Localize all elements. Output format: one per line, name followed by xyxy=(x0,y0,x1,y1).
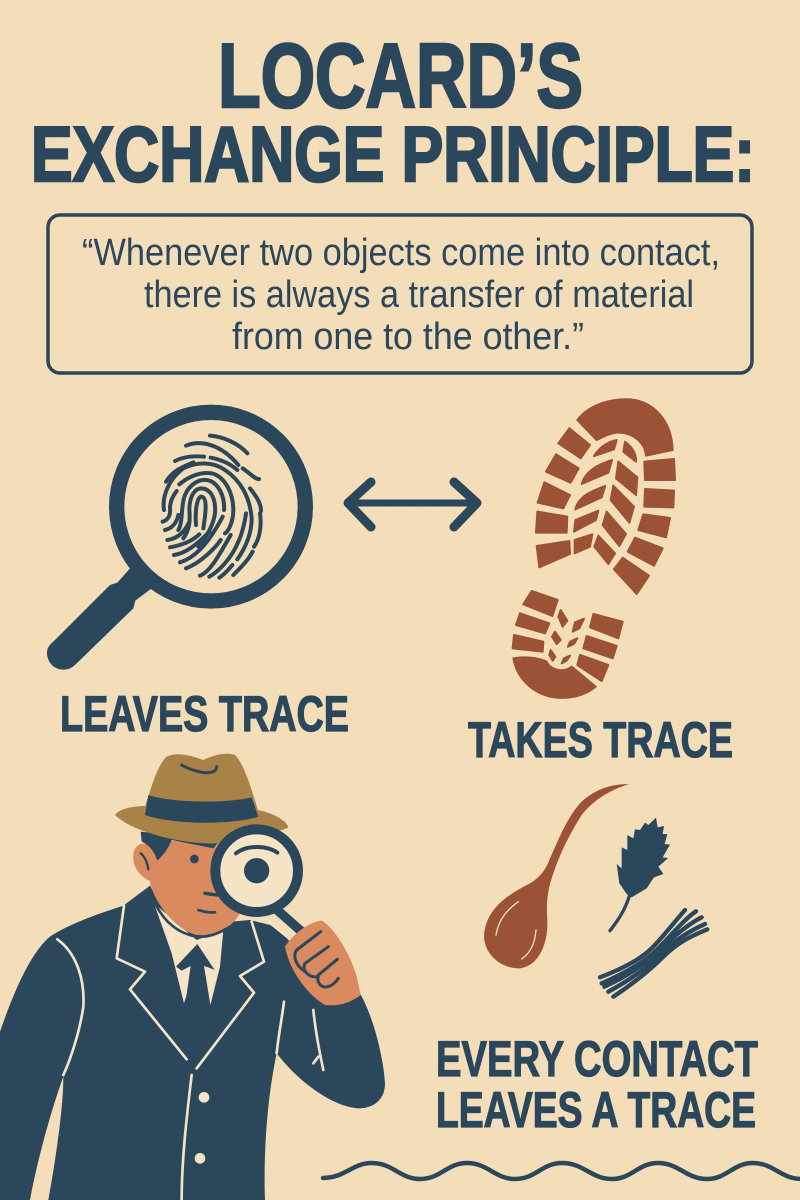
wavy line xyxy=(323,1163,800,1179)
fibres xyxy=(600,910,707,997)
illustration: detective xyxy=(0,754,385,1200)
tie xyxy=(176,944,215,1017)
closing statement xyxy=(436,1031,758,1138)
icon: boot print xyxy=(513,399,675,698)
shirt xyxy=(154,903,223,1007)
hand xyxy=(285,921,361,1005)
quote box: from one to the other.” xyxy=(232,316,584,358)
icon: hair, leaf and fibres xyxy=(484,784,707,997)
hat xyxy=(115,754,288,843)
magnifier xyxy=(215,829,298,912)
coat xyxy=(0,886,385,1200)
hair xyxy=(141,832,220,861)
face xyxy=(150,840,240,935)
label: leaves trace: LEAVES TRACE xyxy=(60,686,349,742)
title: LOCARD’S xyxy=(218,26,583,127)
quote box: “Whenever two objects come into contact, xyxy=(82,232,720,274)
buttons xyxy=(195,1092,209,1164)
coat seams xyxy=(57,906,323,1200)
arrow: two-way exchange xyxy=(348,482,477,527)
ear xyxy=(133,844,157,883)
eye xyxy=(190,855,199,863)
jaw and ear lines xyxy=(141,853,230,937)
hair strand with root xyxy=(484,784,629,968)
leaf xyxy=(610,818,670,931)
title xyxy=(31,26,755,198)
icon: magnifying glass with fingerprint xyxy=(47,412,305,670)
quote box: there is always a transfer of material xyxy=(144,274,694,316)
handle highlight xyxy=(267,920,287,937)
magnifier handle xyxy=(273,907,302,932)
quote box xyxy=(48,215,752,373)
